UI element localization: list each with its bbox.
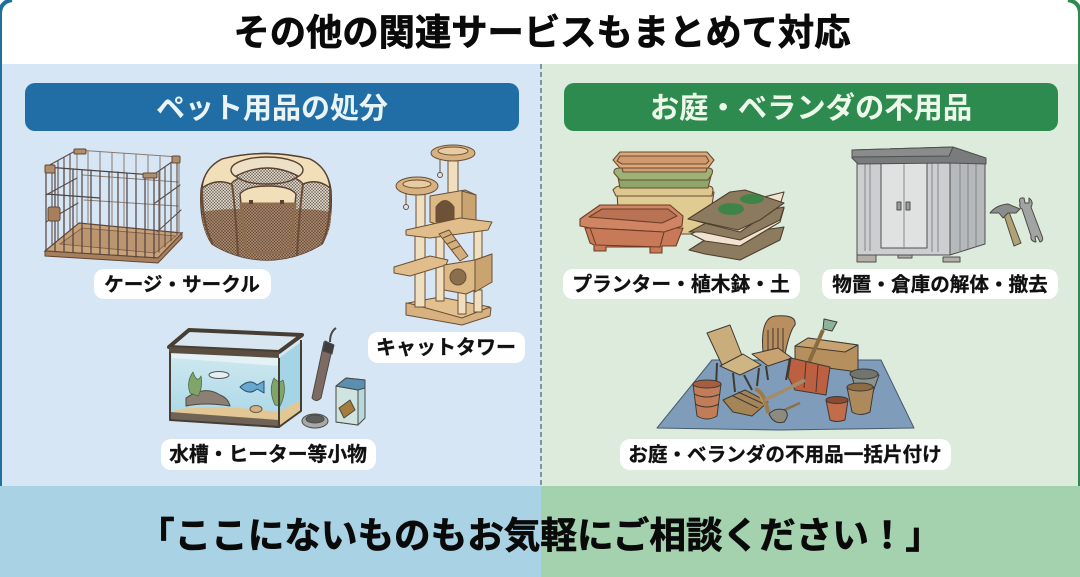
panel: garden and balcony	[541, 0, 1080, 486]
clay pot right	[847, 387, 874, 414]
icon: plastic planters	[613, 152, 714, 234]
tarp sheet	[657, 360, 914, 430]
footer band	[0, 486, 1080, 577]
icon: terracotta planter	[580, 205, 683, 253]
icon: pet playpen	[201, 154, 331, 260]
label: cage and circle	[94, 269, 271, 299]
long-handled shovel	[809, 330, 823, 362]
fallen stool	[755, 389, 768, 413]
heading: garden goods	[564, 83, 1058, 131]
label: cat tower	[368, 332, 525, 363]
label: shed removal: 物置・倉庫の解体・撤去	[832, 274, 1048, 296]
panel: pet goods	[0, 0, 541, 486]
footer message: 「ここにないものもお気軽にご相談ください！」	[138, 515, 942, 556]
label: shed removal	[822, 269, 1058, 299]
chair back right	[762, 316, 795, 354]
icon: storage shed	[852, 147, 986, 262]
label: planters	[563, 269, 800, 299]
icon: soil bags	[688, 190, 784, 260]
label: planters: プランター・植木鉢・土	[572, 274, 790, 296]
hand shovel	[780, 403, 800, 412]
icon: pet cage	[45, 149, 182, 263]
label: bulk clear-out: お庭・ベランダの不用品一括片付け	[628, 443, 942, 466]
title: その他の関連サービスもまとめて対応	[233, 12, 851, 53]
label: cage and circle: ケージ・サークル	[104, 274, 260, 296]
icon: tarp with garden junk	[657, 316, 914, 430]
label: bulk clear-out	[620, 439, 951, 470]
label: aquarium: 水槽・ヒーター等小物	[169, 444, 367, 466]
heading: pet goods: ペット用品の処分	[156, 92, 388, 125]
chair back left	[707, 325, 743, 365]
label: cat tower: キャットタワー	[376, 336, 516, 359]
wooden box	[795, 338, 858, 372]
clay pot red	[826, 400, 848, 422]
scrap wood	[723, 390, 768, 416]
background: white title band	[0, 0, 1080, 64]
clay pots stacked	[693, 381, 721, 419]
heading: pet goods	[25, 83, 519, 131]
metal bucket	[851, 370, 879, 392]
icon: aquarium	[169, 330, 302, 428]
red dustpan	[788, 358, 830, 395]
icon: cat tower	[394, 145, 492, 325]
icon: hammer and wrench	[990, 198, 1043, 246]
label: aquarium	[161, 439, 376, 470]
icon: aquarium heater, dish and food box	[302, 328, 365, 428]
heading: garden goods: お庭・ベランダの不用品	[650, 91, 972, 125]
